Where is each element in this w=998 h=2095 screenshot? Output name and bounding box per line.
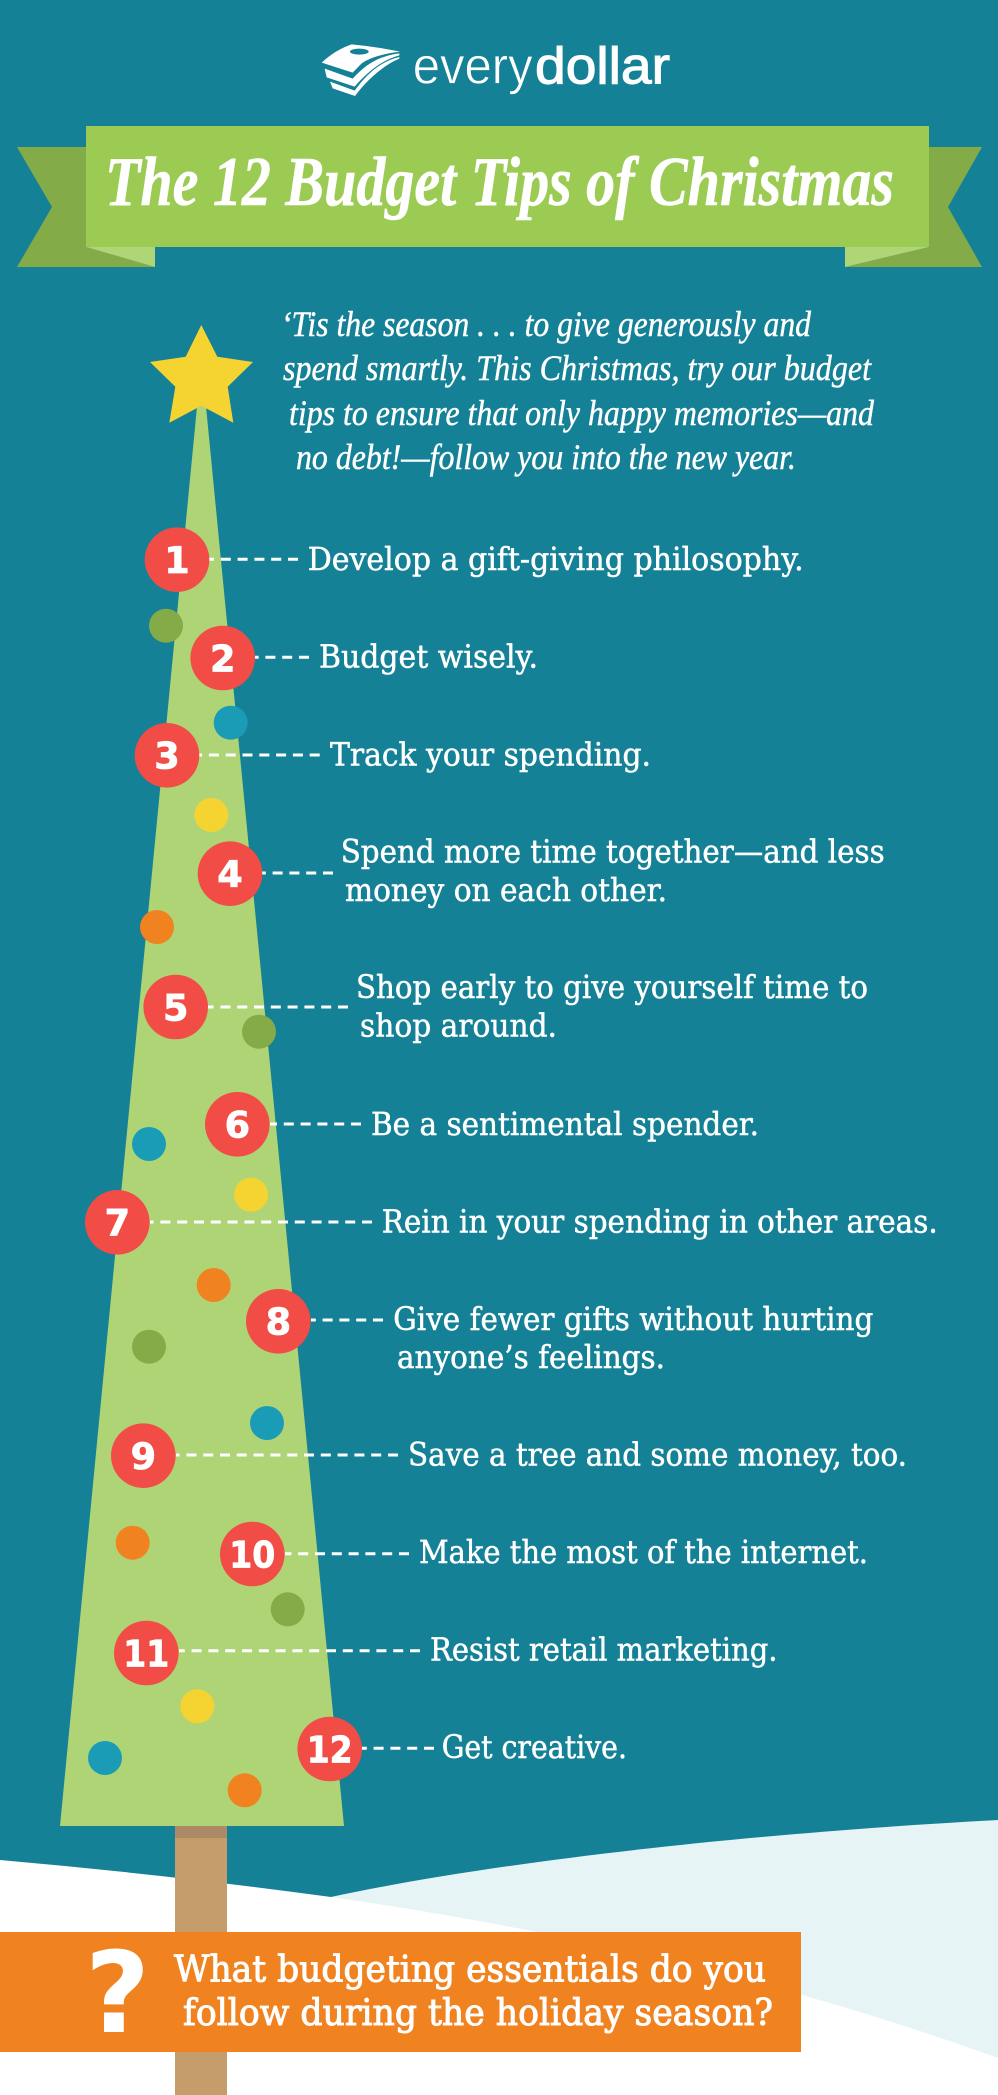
tip 8: 8 bbox=[266, 1301, 291, 1344]
intro text: ‘Tis the season . . . to give generously and bbox=[281, 304, 812, 344]
icon: stack of bills bbox=[322, 44, 400, 96]
tip 3: 3 bbox=[154, 735, 180, 778]
banner right tail bbox=[845, 147, 982, 267]
tree bbox=[60, 360, 344, 1826]
tip 7 bbox=[85, 1190, 938, 1255]
banner left tail bbox=[17, 147, 155, 267]
icon: question mark: ? bbox=[85, 1929, 150, 2059]
intro text bbox=[281, 304, 875, 477]
question text: What budgeting essentials do you bbox=[174, 1948, 766, 1991]
banner left fold bbox=[86, 247, 155, 267]
tip 3: Track your spending. bbox=[330, 737, 651, 773]
tip 11: 11 bbox=[123, 1632, 169, 1675]
tip 10 bbox=[220, 1522, 868, 1586]
tip 9: Save a tree and some money, too. bbox=[408, 1438, 907, 1474]
question text: follow during the holiday season? bbox=[183, 1991, 773, 2034]
tip 6: Be a sentimental spender. bbox=[371, 1107, 759, 1143]
tip 4: 4 bbox=[217, 853, 243, 896]
logo: everydollar bbox=[322, 37, 670, 96]
title banner bbox=[17, 126, 982, 267]
tip 1: Develop a gift-giving philosophy. bbox=[308, 542, 804, 578]
tip 12 bbox=[297, 1717, 627, 1781]
tip 7: Rein in your spending in other areas. bbox=[382, 1205, 938, 1241]
tip 2: 2 bbox=[210, 637, 235, 680]
tip 7: 7 bbox=[105, 1202, 130, 1245]
tip 4 bbox=[198, 835, 885, 909]
baubles bbox=[88, 609, 305, 1807]
tip 10: 10 bbox=[229, 1533, 275, 1576]
snow hill: white left bbox=[0, 1860, 998, 2095]
tip 6: 6 bbox=[225, 1104, 250, 1147]
tip 3 bbox=[135, 723, 651, 788]
tip 1: 1 bbox=[164, 539, 190, 582]
tip 5: shop around. bbox=[360, 1009, 557, 1045]
intro text: tips to ensure that only happy memories—and bbox=[289, 393, 875, 433]
intro text: spend smartly. This Christmas, try our budget bbox=[283, 348, 872, 388]
tip 8 bbox=[246, 1289, 873, 1376]
tip 4: Spend more time together—and less bbox=[341, 835, 885, 871]
tip 5: 5 bbox=[163, 986, 188, 1029]
tip 5: Shop early to give yourself time to bbox=[356, 970, 868, 1006]
tree trunk bbox=[175, 1826, 227, 2095]
tip 6 bbox=[205, 1092, 759, 1157]
logo wordmark: every bbox=[413, 37, 533, 95]
tip 8: Give fewer gifts without hurting bbox=[393, 1302, 873, 1338]
tip 11: Resist retail marketing. bbox=[430, 1633, 778, 1669]
tip 11 bbox=[114, 1621, 778, 1685]
tip 9: 9 bbox=[131, 1435, 156, 1478]
logo wordmark: dollar bbox=[535, 37, 670, 95]
tip 5 bbox=[143, 970, 868, 1045]
banner main bbox=[86, 126, 929, 247]
question sign bbox=[0, 1929, 801, 2059]
sign panel bbox=[0, 1932, 801, 2052]
tip 4: money on each other. bbox=[345, 873, 667, 909]
tip 10: Make the most of the internet. bbox=[419, 1535, 868, 1571]
tip 1 bbox=[145, 527, 804, 592]
banner right fold bbox=[845, 247, 929, 267]
tip 9 bbox=[111, 1423, 907, 1488]
intro text: no debt!—follow you into the new year. bbox=[296, 437, 796, 477]
snow hill: pale right bbox=[331, 1820, 998, 2095]
tip 12: Get creative. bbox=[442, 1730, 627, 1766]
tip 12: 12 bbox=[307, 1728, 353, 1771]
tip 2: Budget wisely. bbox=[319, 640, 538, 676]
question text bbox=[174, 1948, 773, 2034]
tip 8: anyone’s feelings. bbox=[397, 1340, 665, 1376]
tip 2 bbox=[190, 626, 538, 690]
star bbox=[150, 325, 253, 423]
